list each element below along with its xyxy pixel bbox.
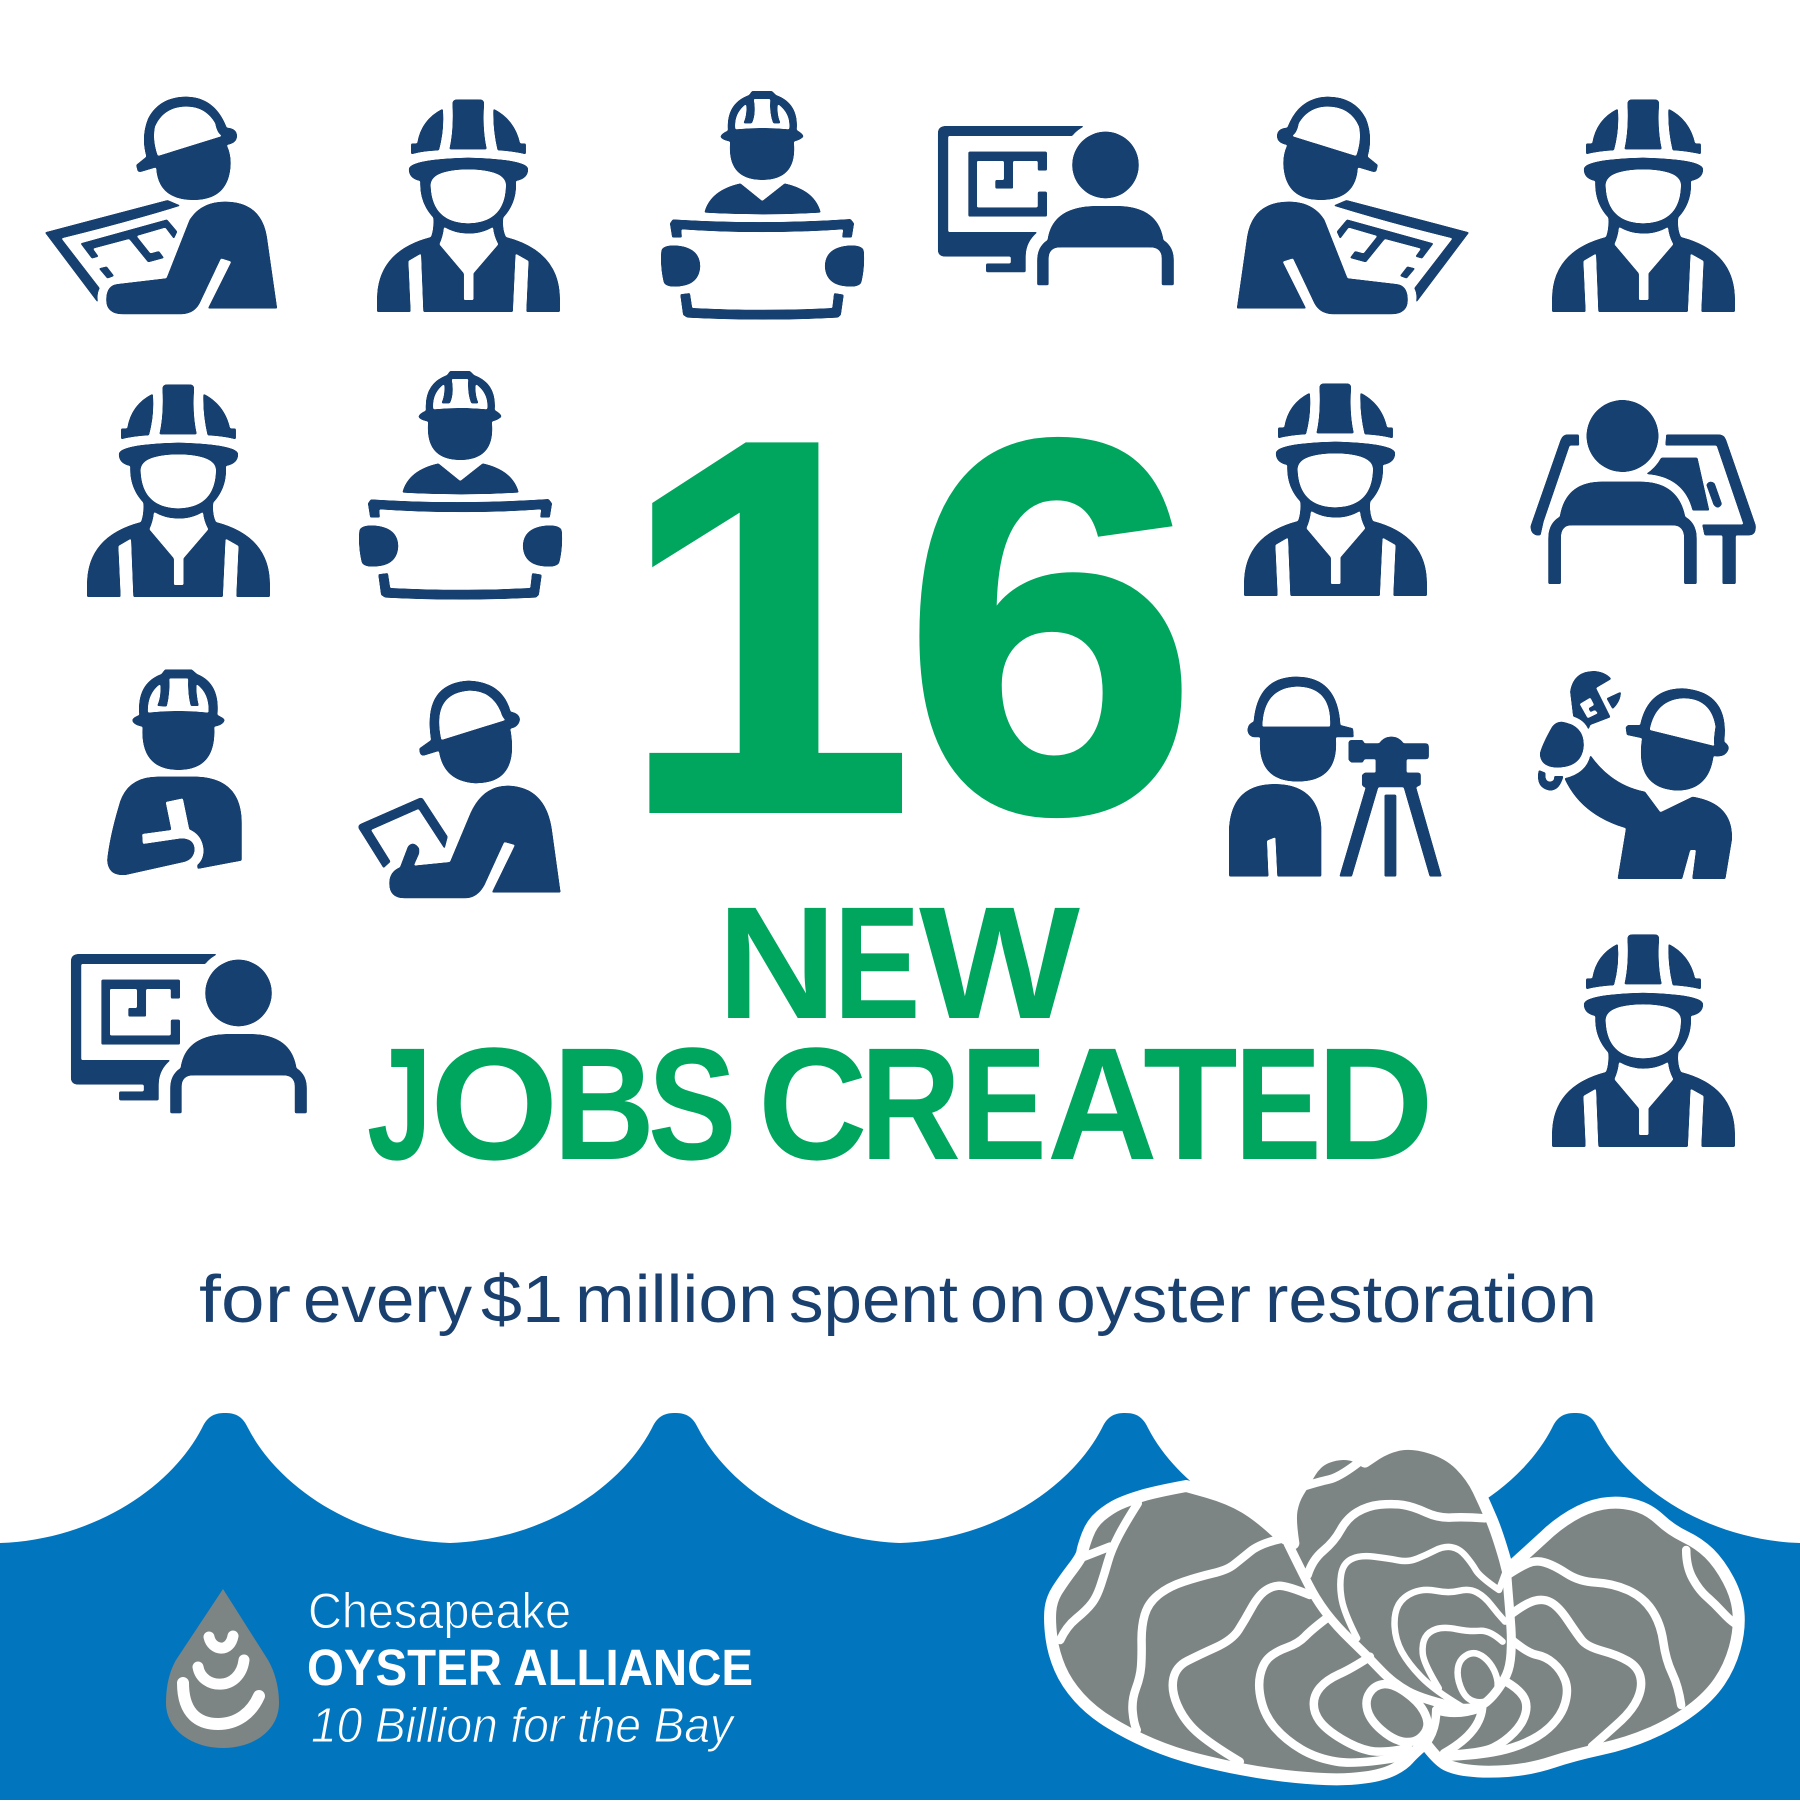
logo text: Oyster Alliance: OYSTER ALLIANCE <box>307 1639 753 1696</box>
icon: engineer holding plan <box>661 91 864 320</box>
icon: worker in hard hat and vest <box>1552 99 1735 312</box>
icon: surveyor with tripod <box>1229 677 1442 877</box>
worker icon group <box>45 91 1756 1147</box>
heading: jobs created: O <box>430 1014 558 1193</box>
oyster white growth lines <box>1060 1462 1735 1763</box>
logo text: tagline: 10 Billion for the Bay <box>311 1699 735 1753</box>
subheading text: spent <box>789 1262 958 1337</box>
logo: oyster alliance droplet <box>166 1589 279 1748</box>
big number 16: 16 <box>619 331 1198 923</box>
icon: worker reading blueprint mirrored <box>1237 97 1469 314</box>
heading: new: N <box>717 873 837 1052</box>
icon: designer at monitor <box>938 126 1174 285</box>
subheading text: million <box>575 1262 778 1337</box>
heading: new: E <box>834 873 920 1052</box>
subheading text: oyster <box>1056 1262 1251 1337</box>
illustration: oyster shells <box>1050 1444 1739 1779</box>
icon: worker in hard hat and vest <box>1244 383 1427 596</box>
heading: jobs created: R <box>860 1014 961 1193</box>
oyster grey body with white outline <box>1050 1444 1739 1779</box>
heading: jobs created: E <box>961 1014 1047 1193</box>
icon: worker in hard hat and vest <box>377 99 560 312</box>
subheading text: every <box>303 1262 473 1337</box>
icon: worker in hard hat and vest <box>87 384 270 597</box>
icon: designer at monitor <box>71 954 307 1113</box>
heading: jobs created: C <box>758 1014 868 1193</box>
subheading text: for <box>199 1262 291 1337</box>
icon: worker in hard hat and vest <box>1552 934 1735 1147</box>
heading: new: W <box>919 873 1080 1052</box>
icon: engineer holding plan <box>359 371 562 600</box>
blue wave footer <box>0 1413 1800 1800</box>
icon: foreman with folded arms <box>107 669 242 875</box>
heading: jobs created: B <box>553 1014 655 1193</box>
subheading text: $1 <box>481 1262 563 1337</box>
heading: jobs created: S <box>648 1014 736 1193</box>
subheading text: on <box>970 1262 1046 1337</box>
subheading text: restoration <box>1265 1262 1597 1337</box>
heading: jobs created: D <box>1316 1014 1434 1193</box>
heading: jobs created: E <box>1234 1014 1322 1193</box>
heading: jobs created: T <box>1143 1014 1238 1193</box>
icon: worker reading blueprint <box>45 97 277 314</box>
heading: jobs created: J <box>367 1014 432 1193</box>
icon: mechanic with wrench <box>1538 671 1732 879</box>
heading: jobs created: A <box>1047 1014 1158 1193</box>
icon: person at drafting desk <box>1531 400 1756 584</box>
logo text: Chesapeake: Chesapeake <box>308 1583 571 1639</box>
icon: worker with tablet <box>358 681 561 898</box>
